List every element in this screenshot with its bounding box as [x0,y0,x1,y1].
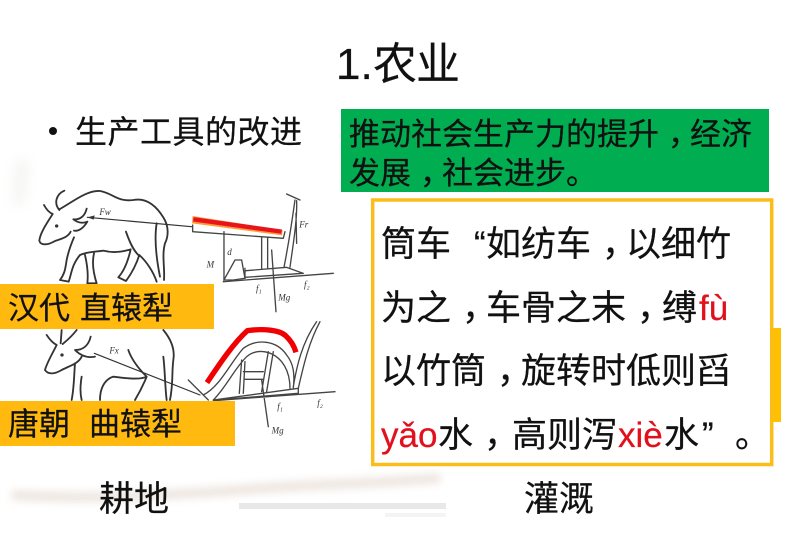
panel: quote on the water wheel: 为之，车骨之末，缚 [381,289,697,328]
ox one [39,191,168,283]
panel: quote on the water wheel: 水”。 [664,416,770,455]
illustration: Han dynasty straight-shaft plough [39,191,333,312]
plough two: f₂ [317,398,323,408]
caption: irrigation: 灌溉 [524,480,594,519]
plough two: f₁ [277,401,283,411]
label: Han dynasty plough: 汉代直辕犁 [8,291,173,326]
panel: quote on the water wheel: yǎo [381,416,437,455]
panel: quote on the water wheel: xiè [618,416,663,455]
panel: green summary: 推动社会生产力的提升，经济 [349,117,752,152]
panel: quote on the water wheel [373,200,772,464]
panel: quote on the water wheel: 筒车“如纺车，以细竹 [381,225,731,264]
title: 业 [416,40,460,89]
plough one: f₁ [256,284,262,294]
plough one: Mg [277,293,291,303]
title: 农 [373,40,417,89]
plough one: M [206,259,215,269]
plough one: d [227,247,232,257]
plough one: f₂ [304,279,310,289]
label: Tang dynasty plough: 唐朝曲辕犁 [8,407,182,442]
ox two [45,330,174,400]
accent bar behind quote panel [772,328,781,422]
panel: green summary [341,109,769,192]
panel: green summary: 发展，社会进步。 [349,156,597,191]
plough one: Fr [298,219,309,229]
caption: ploughing: 耕地 [99,480,169,519]
label: Han dynasty plough [0,284,214,329]
plough two [94,322,335,435]
illustration: Tang dynasty curved-shaft plough [45,322,335,435]
plough two: Fx [108,345,119,355]
title: 1. [336,40,373,89]
plough one: Fw [98,207,111,217]
plough two: Mg [271,425,284,435]
panel: quote on the water wheel: fù [699,289,728,328]
plough one [87,194,333,312]
label: Tang dynasty plough [0,401,235,446]
bullet heading: 生产工具的改进 [75,114,302,150]
panel: quote on the water wheel: 以竹筒，旋转时低则舀 [381,352,731,391]
panel: quote on the water wheel: 水，高则泻 [438,416,617,455]
